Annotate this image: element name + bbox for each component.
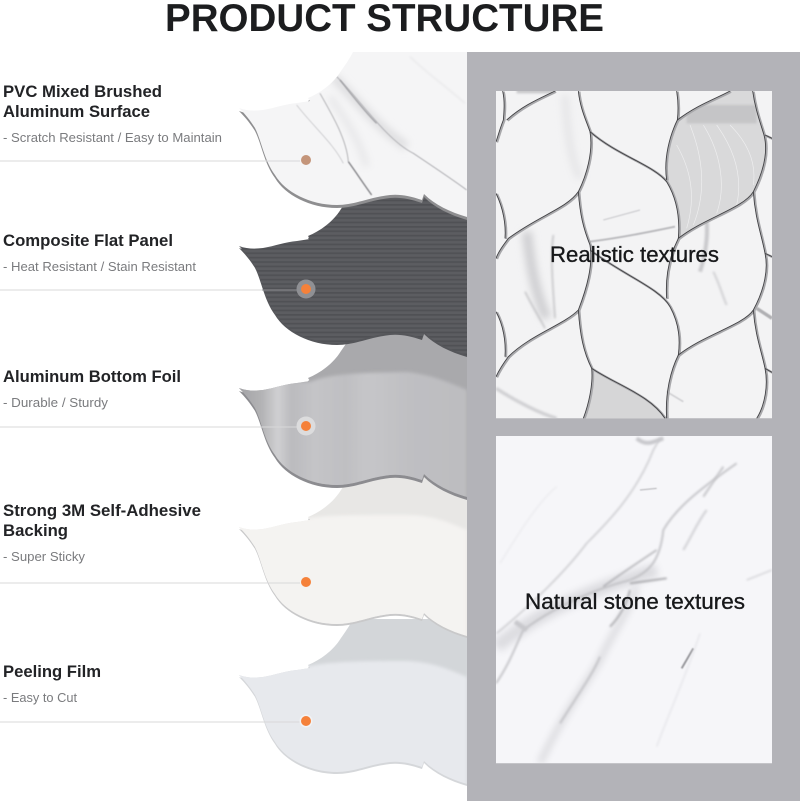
label: composite flat panel: Composite Flat Panel	[3, 231, 173, 250]
label: peeling film	[0, 662, 312, 728]
label: aluminum bottom foil: Aluminum Bottom Foil	[3, 367, 181, 386]
label: peeling film: Peeling Film	[3, 662, 101, 681]
label: PVC surface: - Scratch Resistant / Easy to Maintain	[3, 130, 222, 145]
panel: natural stone textures photo: Natural stone textures	[525, 589, 745, 614]
layer: self-adhesive backing	[239, 477, 467, 638]
label: self-adhesive backing: Strong 3M Self-Adhesive	[3, 501, 201, 520]
label: PVC surface	[0, 82, 311, 165]
layer: aluminum foil	[239, 334, 467, 500]
label: self-adhesive backing: - Super Sticky	[3, 549, 85, 564]
layer: composite flat panel	[239, 190, 467, 357]
label: self-adhesive backing: Backing	[3, 521, 68, 540]
label: PVC surface: Aluminum Surface	[3, 102, 150, 121]
label: aluminum bottom foil	[0, 367, 316, 436]
layer: peeling film	[230, 619, 467, 797]
panel: realistic textures tile photo	[496, 91, 773, 419]
label: composite flat panel	[0, 231, 316, 298]
panel: realistic textures tile photo: Realistic textures	[550, 242, 719, 267]
label: aluminum bottom foil: - Durable / Sturdy	[3, 395, 109, 410]
right grey panel	[467, 52, 800, 801]
label: composite flat panel: - Heat Resistant / Stain Resistant	[3, 259, 196, 274]
label: peeling film: - Easy to Cut	[3, 690, 77, 705]
label: self-adhesive backing	[0, 501, 311, 587]
layer: marble surface	[239, 52, 467, 220]
panel: natural stone textures photo	[496, 436, 772, 763]
label: PVC surface: PVC Mixed Brushed	[3, 82, 162, 101]
